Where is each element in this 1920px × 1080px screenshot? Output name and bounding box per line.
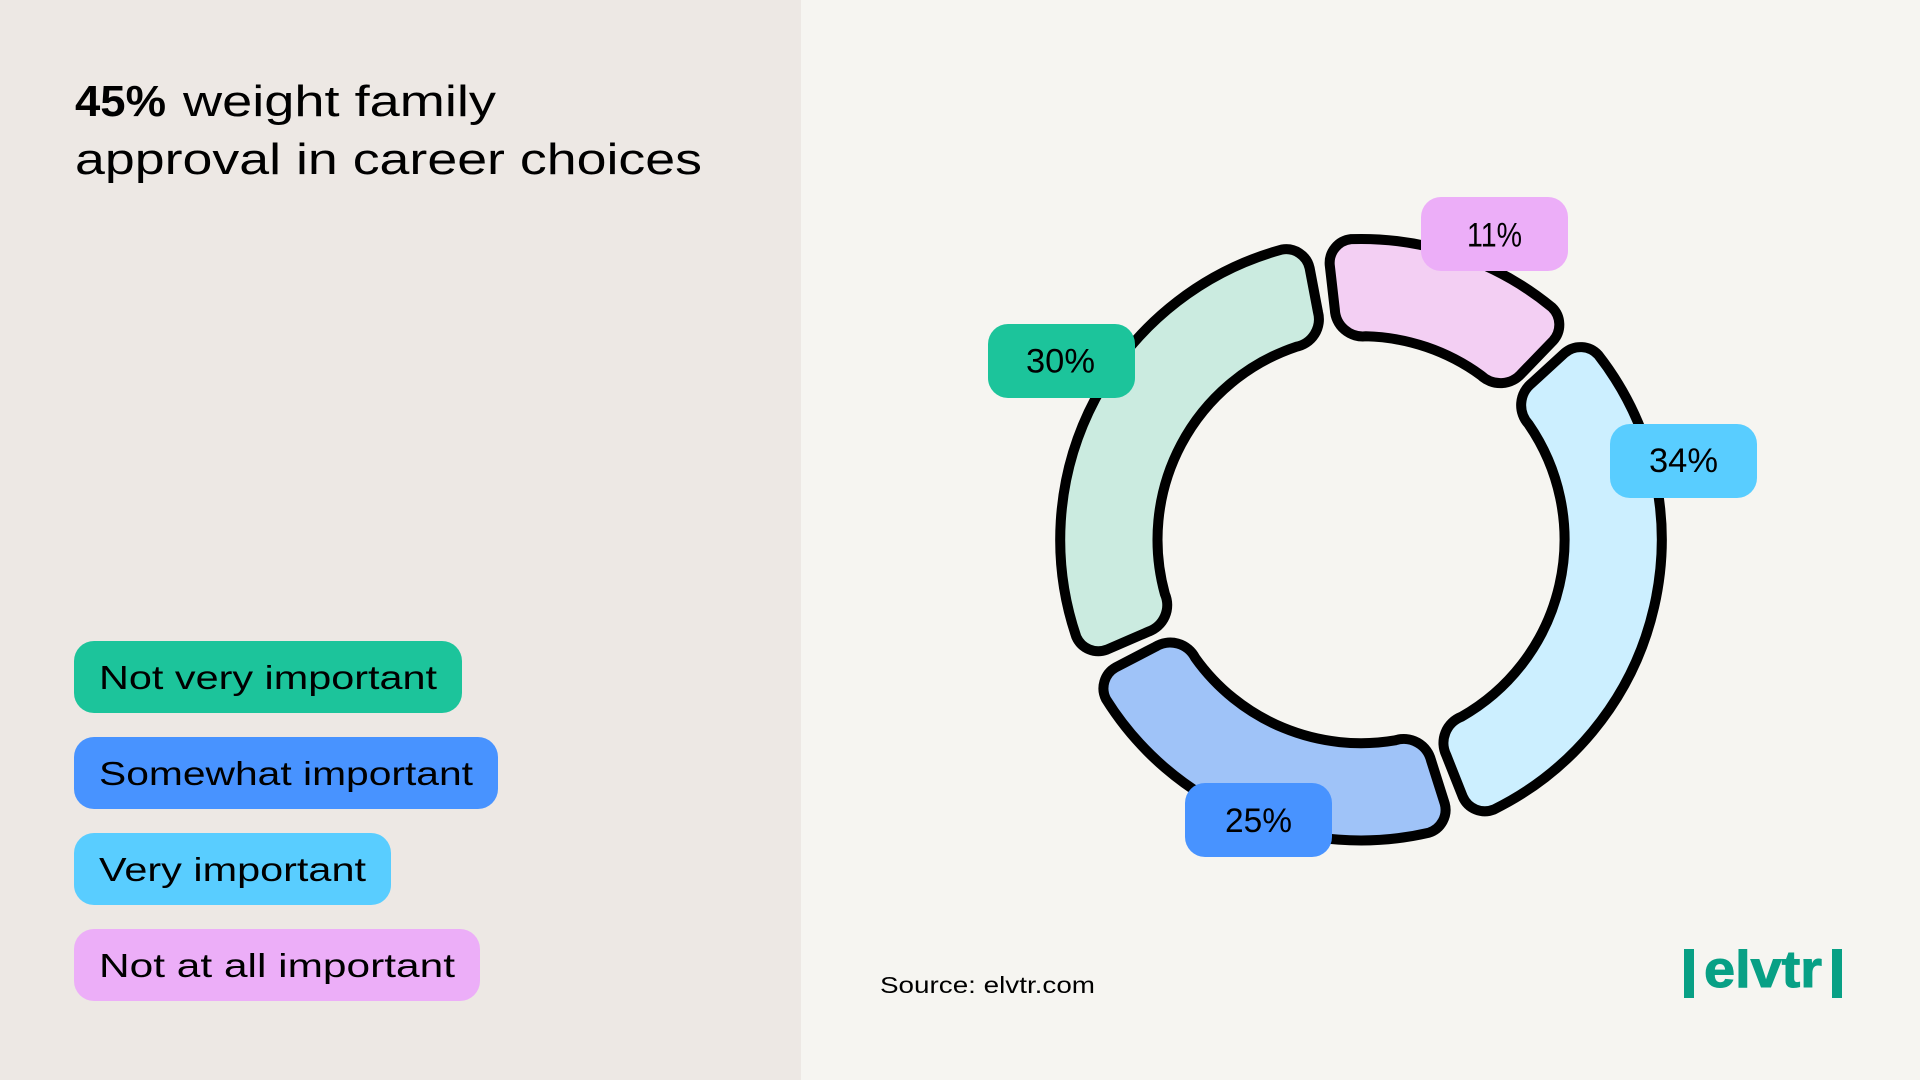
title	[75, 77, 702, 184]
value label: 30%	[988, 324, 1135, 398]
segment: not very important 30%	[1060, 249, 1319, 651]
value label: 34%: 34%	[1649, 442, 1718, 480]
value label: 11%	[1421, 197, 1568, 271]
legend item: not at all important: Not at all important	[99, 947, 455, 984]
value label: 11%: 11%	[1467, 216, 1522, 254]
legend item: very important: Very important	[99, 851, 366, 888]
title: weight family	[182, 77, 496, 126]
segment: not at all important 11%	[1330, 239, 1559, 383]
value label: 25%	[1185, 783, 1332, 857]
title: approval in career choices	[75, 135, 702, 184]
value label: 25%: 25%	[1225, 802, 1292, 840]
panel: left background	[0, 0, 801, 1080]
logo: elvtr	[1684, 941, 1842, 999]
legend	[74, 641, 498, 1001]
segment: somewhat important 25%	[1103, 643, 1446, 840]
segment: very important 34%	[1443, 347, 1662, 811]
legend item: somewhat important	[74, 737, 498, 809]
legend item: not at all important	[74, 929, 480, 1001]
value label: 30%: 30%	[1026, 342, 1095, 380]
value label: 34%	[1610, 424, 1757, 498]
logo: elvtr: elvtr	[1704, 941, 1822, 999]
title: 45%	[75, 77, 166, 126]
legend item: somewhat important: Somewhat important	[99, 755, 473, 792]
source note: Source: elvtr.com	[880, 972, 1095, 998]
legend item: not very important: Not very important	[99, 659, 437, 696]
legend item: not very important	[74, 641, 462, 713]
donut chart	[1060, 239, 1662, 840]
legend item: very important	[74, 833, 391, 905]
